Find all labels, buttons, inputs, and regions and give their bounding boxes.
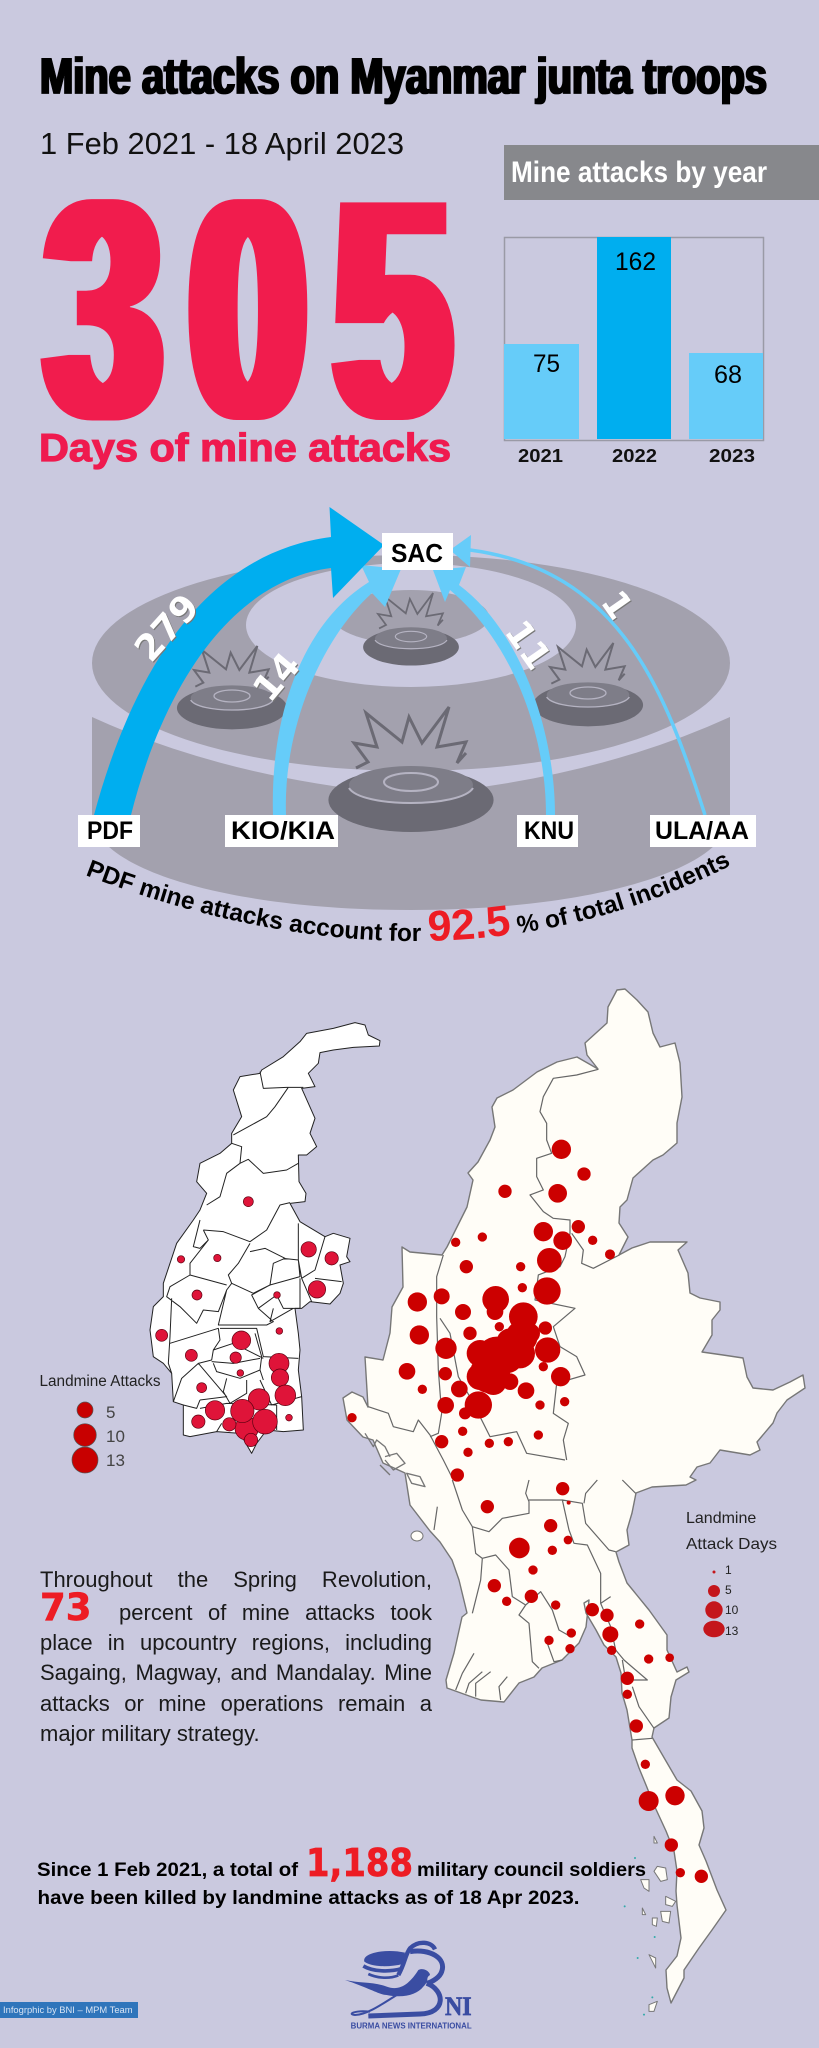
killed statement <box>37 1841 646 1909</box>
text block: upcountry regions: major military strategy. <box>40 1721 260 1746</box>
map: Myanmar <box>343 989 805 2016</box>
region boundaries south <box>434 1480 654 1740</box>
region boundaries north <box>368 1069 619 1480</box>
curved caption: PDF mine attacks account for 92.5 % of total incidents <box>86 855 730 942</box>
legend: Landmine Attack Days: 1 <box>725 1563 732 1577</box>
label: SAC <box>382 533 453 570</box>
credit tag: Infogrphic by BNI – MPM Team <box>3 2004 133 2015</box>
subheading: days of mine attacks: Days of mine attacks <box>39 427 451 470</box>
legend: Landmine Attacks: 13 <box>106 1451 125 1470</box>
map: Sagaing region <box>150 1023 380 1453</box>
bar 2021 <box>504 344 579 439</box>
killed statement: Since 1 Feb 2021, a total of <box>37 1859 299 1881</box>
flow numbers: 14 <box>245 645 309 710</box>
arrow: ULA/AA to SAC <box>450 535 705 815</box>
label: PDF: PDF <box>87 817 133 845</box>
BNI logo: BURMA NEWS INTERNATIONAL <box>351 2020 472 2030</box>
attack-day dots south <box>639 1786 708 1883</box>
text block: upcountry regions <box>40 1567 432 1746</box>
text block: upcountry regions: Throughout the Spring Revolution, <box>40 1567 432 1592</box>
BNI logo: NI <box>445 1992 472 2021</box>
label: KIO/KIA: KIO/KIA <box>231 817 335 845</box>
year labels: 2021 <box>518 446 563 466</box>
bar 2023: 68 <box>714 361 742 389</box>
mine illustration <box>92 555 730 910</box>
year labels: 2022 <box>612 446 657 466</box>
arrow: KNU to SAC <box>433 567 555 815</box>
figure 1,188: 1,188 <box>306 1841 413 1885</box>
flow numbers: 11 <box>496 613 559 678</box>
text block: upcountry regions: attacks or mine operations remain a <box>40 1691 432 1716</box>
legend: Landmine Attack Days <box>686 1510 777 1638</box>
text block: upcountry regions: 73 percent of mine attacks took <box>40 1586 432 1629</box>
attack-day dots central <box>481 1500 674 1769</box>
text block: upcountry regions: Sagaing, Magway, and Mandalay. Mine <box>40 1660 432 1685</box>
legend: Landmine Attack Days: Attack Days <box>686 1536 777 1553</box>
islands Rakhine coast <box>365 1433 425 1487</box>
text block: upcountry regions: place in upcountry regions, including <box>40 1630 432 1655</box>
bar 2021: 75 <box>533 350 560 378</box>
legend: Landmine Attacks: Landmine Attacks <box>40 1373 161 1390</box>
big number 305: 305 <box>46 136 450 484</box>
credit tag <box>0 2002 138 2018</box>
legend: Landmine Attack Days: 5 <box>725 1583 732 1597</box>
killed statement: have been killed by landmine attacks as of 18 Apr 2023. <box>38 1887 580 1909</box>
legend: Landmine Attacks: 10 <box>106 1427 125 1446</box>
chart header: Mine attacks by year <box>511 156 767 189</box>
chart header <box>504 145 819 200</box>
BNI logo <box>345 1943 472 2030</box>
flow numbers: 279 <box>127 587 208 670</box>
arrow: PDF to SAC <box>94 507 384 815</box>
date range: 1 Feb 2021 - 18 April 2023 <box>40 126 404 161</box>
bar 2022: 162 <box>615 248 656 276</box>
Sagaing attack dots <box>156 1197 338 1447</box>
legend: Landmine Attacks <box>40 1373 161 1473</box>
legend: Landmine Attacks: 5 <box>106 1403 115 1422</box>
flow numbers: 1 <box>592 583 640 627</box>
label: KNU: KNU <box>524 817 574 845</box>
attack-day dots north <box>347 1140 615 1495</box>
killed statement: military council soldiers <box>417 1859 646 1881</box>
label: ULA/AA: ULA/AA <box>655 817 749 845</box>
islands south <box>624 1836 676 2016</box>
bar 2023 <box>689 353 763 439</box>
arrow: KIO/KIA to SAC <box>273 565 401 815</box>
legend: Landmine Attack Days: 13 <box>725 1624 739 1638</box>
flow numbers <box>127 583 640 710</box>
legend: Landmine Attack Days: Landmine <box>686 1510 756 1527</box>
year labels: 2023 <box>709 446 755 466</box>
bar 2022 <box>597 237 671 439</box>
year labels <box>518 446 755 466</box>
bar chart: mine attacks by year <box>504 237 764 466</box>
legend: Landmine Attack Days: 10 <box>725 1603 739 1617</box>
label: SAC: SAC <box>391 538 443 568</box>
